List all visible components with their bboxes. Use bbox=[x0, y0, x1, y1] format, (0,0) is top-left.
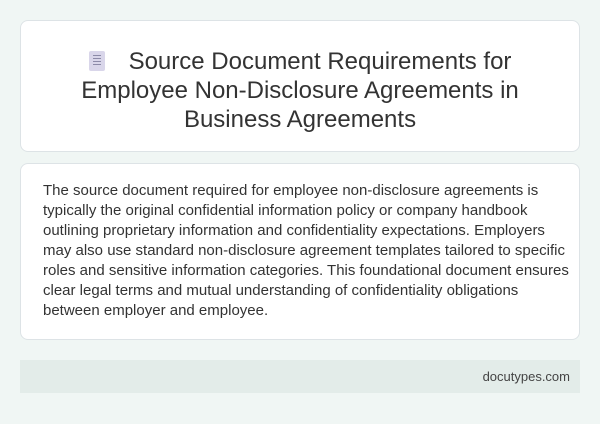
footer bbox=[20, 360, 580, 393]
description text: The source document required for employee non-disclosure agreements is bbox=[43, 182, 538, 199]
title bbox=[81, 48, 519, 133]
title: Employee Non-Disclosure Agreements in bbox=[81, 77, 519, 104]
description card bbox=[20, 163, 580, 340]
footer: docutypes.com bbox=[483, 369, 570, 384]
title: Source Document Requirements for bbox=[129, 48, 511, 75]
title: Business Agreements bbox=[184, 106, 416, 133]
description text: between employer and employee. bbox=[43, 302, 268, 319]
icon: document bbox=[89, 51, 105, 71]
description text: roles and sensitive information categories. This foundational document ensures bbox=[43, 262, 569, 279]
description text: clear legal terms and mutual understanding of confidentiality obligations bbox=[43, 282, 518, 299]
title card bbox=[20, 20, 580, 152]
description text: outlining proprietary information and confidentiality expectations. Employers bbox=[43, 222, 545, 239]
description text: typically the original confidential information policy or company handbook bbox=[43, 202, 527, 219]
description text bbox=[43, 182, 569, 319]
description text: may also use standard non-disclosure agreement templates tailored to specific bbox=[43, 242, 565, 259]
